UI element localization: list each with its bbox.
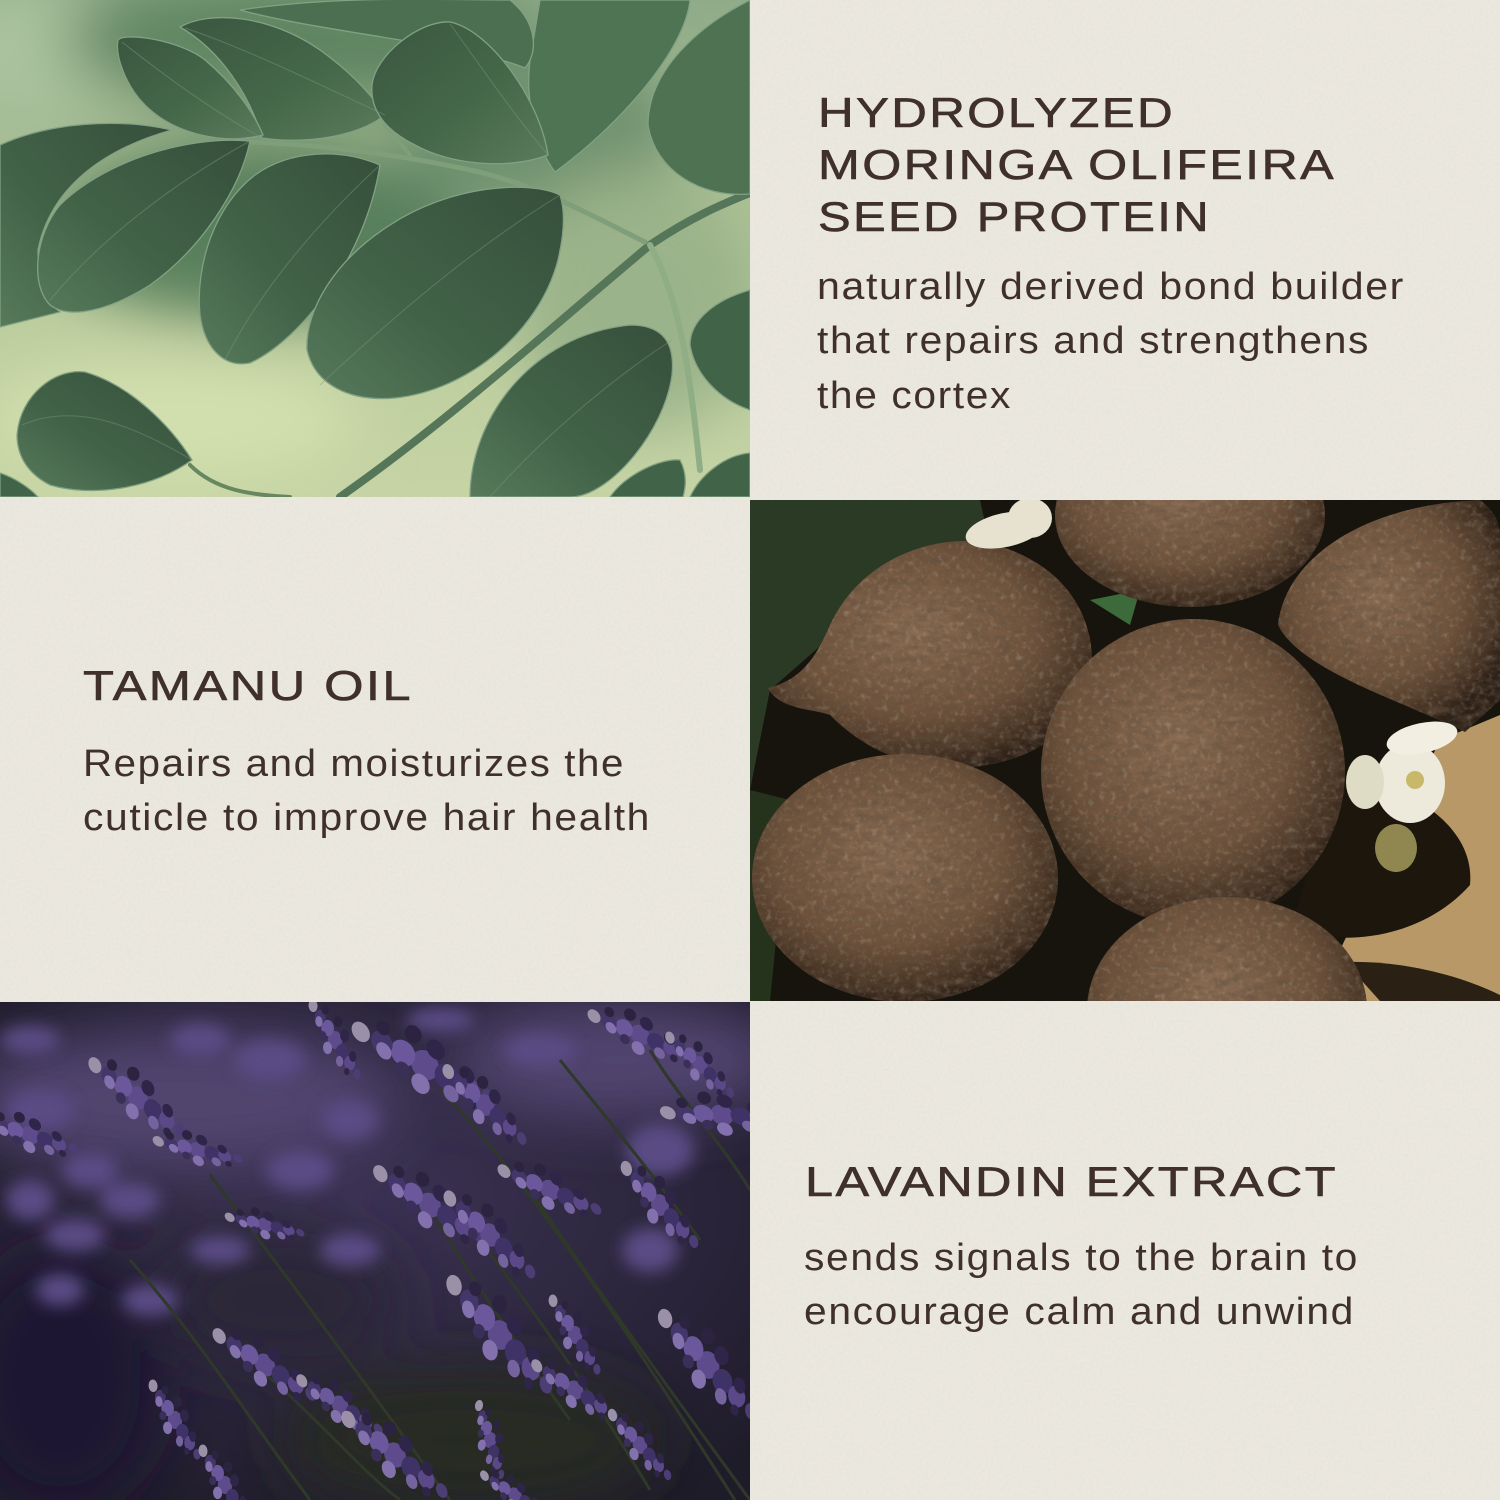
description: moringa	[817, 266, 1405, 417]
leaf: centre mid	[199, 154, 380, 364]
text block: tamanu	[83, 662, 651, 839]
text block: moringa	[817, 89, 1405, 417]
leaf: large central	[307, 187, 564, 399]
heading: tamanu: TAMANU OIL	[83, 662, 413, 709]
description: lavandin: sends signals to the brain to	[804, 1237, 1359, 1279]
leaf: centre top	[372, 22, 548, 164]
blurred background field	[0, 1000, 790, 1500]
leaf: bottom small	[610, 460, 685, 497]
flower: top	[962, 498, 1052, 555]
leaf: far left	[0, 123, 172, 327]
leaf: left second	[38, 140, 250, 312]
husk texture	[750, 500, 1500, 1001]
blurred blossoms	[0, 1008, 694, 1316]
stems	[130, 1050, 750, 1500]
leaf: lower left	[17, 372, 192, 491]
leaf: top centre right	[529, 0, 690, 172]
panel: tamanu nuts photo	[750, 500, 1500, 1001]
leaf: lower right	[470, 325, 673, 497]
description: moringa: naturally derived bond builder	[817, 266, 1405, 308]
description: lavandin	[804, 1237, 1359, 1333]
leaf: top far right	[648, 0, 750, 194]
leaf: top-left dark	[117, 37, 263, 139]
leaf: upper small right	[180, 18, 385, 140]
heading: lavandin: LAVANDIN EXTRACT	[805, 1158, 1338, 1205]
blurred background foliage	[0, 0, 770, 480]
description: tamanu: cuticle to improve hair health	[83, 797, 651, 839]
panel: moringa leaves photo	[0, 0, 770, 497]
description: lavandin: encourage calm and unwind	[804, 1291, 1355, 1333]
text block: lavandin	[804, 1158, 1359, 1333]
nut: bottom	[1087, 897, 1367, 1123]
panel: lavender photo	[0, 978, 790, 1500]
description: moringa: that repairs and strengthens	[817, 320, 1370, 362]
heading: moringa: SEED PROTEIN	[818, 193, 1211, 240]
nut: centre large	[1041, 619, 1345, 925]
description: moringa: the cortex	[817, 375, 1012, 417]
nut: top middle	[1055, 423, 1325, 607]
leaf: bottom right	[690, 453, 750, 497]
green leaf backdrop	[750, 500, 990, 790]
heading: moringa: HYDROLYZED	[818, 89, 1175, 136]
nuts	[752, 423, 1500, 1123]
leaf: top behind	[240, 0, 533, 68]
wooden surface	[1300, 715, 1500, 1001]
lavender flower spikes	[0, 978, 785, 1500]
leaf: bottom left corner	[0, 473, 38, 497]
nut: top right	[1278, 500, 1500, 732]
leaf midribs	[22, 24, 672, 497]
leaves	[0, 0, 750, 497]
heading: moringa: MORINGA OLIFEIRA	[818, 141, 1336, 188]
nut: upper left with tail	[768, 541, 1092, 768]
description: tamanu: Repairs and moisturizes the	[83, 743, 625, 785]
flower: right	[1346, 716, 1460, 872]
leaf: right edge	[690, 290, 750, 410]
stems	[190, 125, 750, 497]
description: tamanu	[83, 743, 651, 839]
nut: lower left	[752, 754, 1058, 1002]
nut shadow	[1290, 770, 1470, 938]
heading: moringa	[818, 89, 1336, 240]
